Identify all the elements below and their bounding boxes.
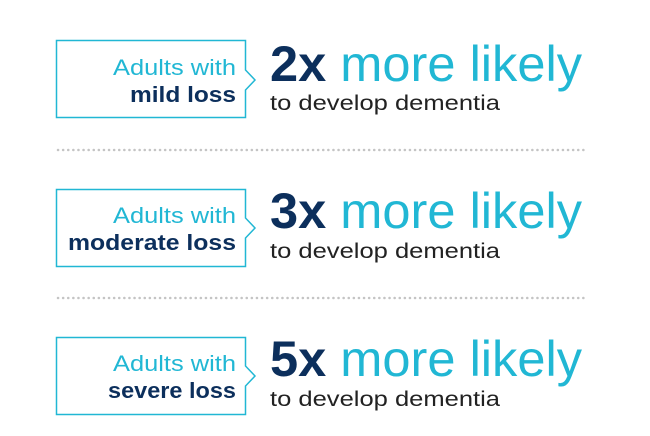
callout box: moderate loss: Adults with [113,203,236,228]
row: moderate loss [56,183,582,266]
callout box: moderate loss [56,190,255,266]
callout box: moderate loss: moderate loss [68,230,236,255]
stat: 2x more likely: to develop dementia [270,92,500,115]
stat: 3x more likely: to develop dementia [270,240,500,263]
row: mild loss [56,36,582,118]
callout box: severe loss: Adults with [113,351,236,376]
stat: 5x more likely [270,331,582,411]
stat: 2x more likely: 2x more likely [270,36,582,92]
callout box: mild loss [56,40,255,118]
stat: 5x more likely: 5x more likely [270,331,582,387]
callout box: mild loss: Adults with [113,55,236,80]
callout box: mild loss: mild loss [130,82,236,107]
row: severe loss [56,331,582,414]
callout box: severe loss: severe loss [108,378,236,403]
stat: 5x more likely: to develop dementia [270,388,500,411]
callout box: severe loss [56,338,255,414]
stat: 3x more likely [270,183,582,263]
stat: 3x more likely: 3x more likely [270,183,582,239]
